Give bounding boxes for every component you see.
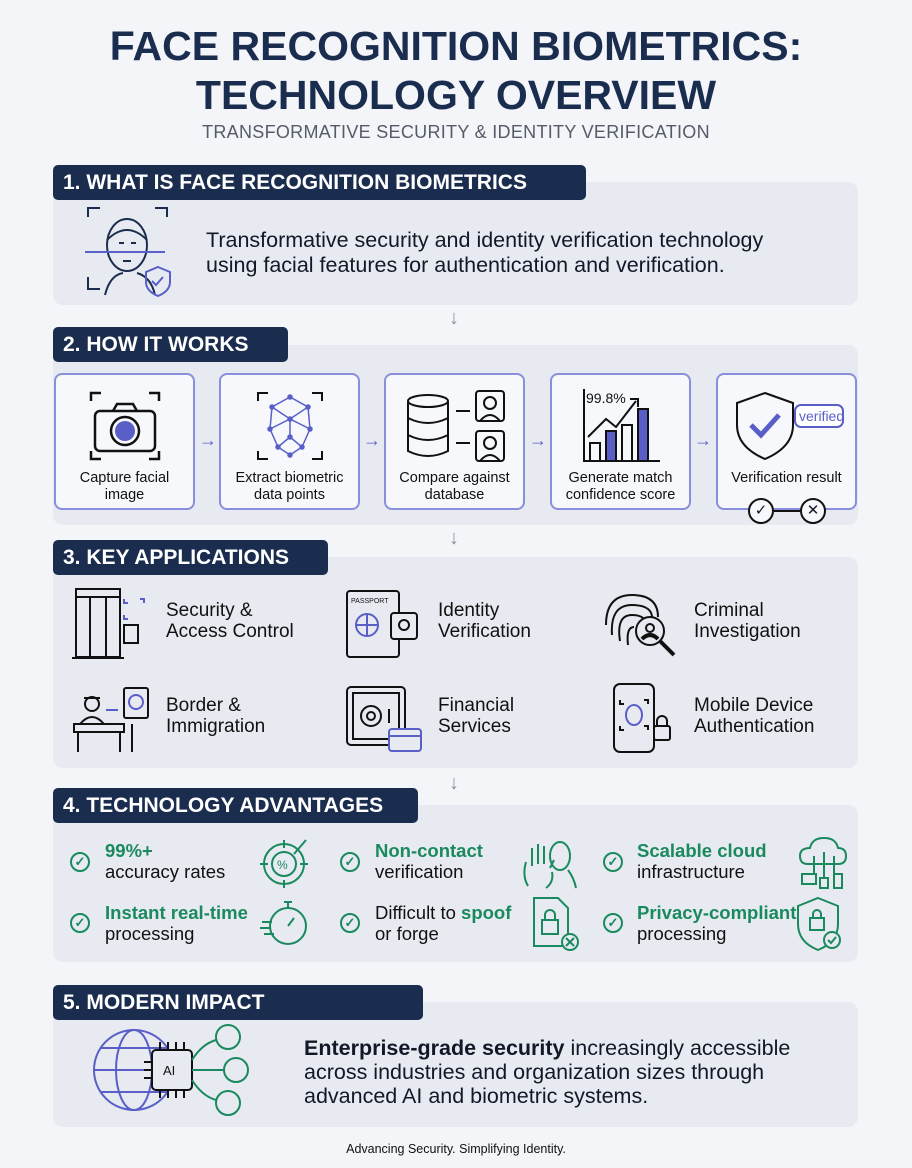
advantage: spoof: or forge [375,923,439,944]
card: extract: data points [254,487,325,503]
panel: advantages [53,805,858,962]
text: identity: Identity [438,600,499,621]
advantage: privacy: processing [637,923,726,944]
text: impact: across industries and organization sizes through [304,1060,764,1084]
advantage: spoof: ✓ [345,915,355,930]
heading 2 [53,327,288,362]
advantage: non-contact: Non-contact [375,840,483,861]
advantage: cloud: infrastructure [637,861,745,882]
card: score: confidence score [566,487,675,503]
text: mobile: Mobile Device [694,695,813,716]
text: border: Border & [166,695,241,716]
panel: applications [53,557,858,768]
advantage: accuracy: ✓ [75,854,85,869]
text: security: Access Control [166,621,294,642]
advantage: real-time: processing [105,923,194,944]
icon: check/cross: ✕ [807,502,819,519]
icon: safe [346,686,422,752]
text: security [166,600,294,642]
card: result: verified [798,408,844,424]
advantage: accuracy: 99%+ [105,840,153,861]
advantage: non-contact [340,840,577,889]
text: border: Immigration [166,716,265,737]
icon: AI globe [93,1024,249,1116]
card: capture [54,373,195,510]
heading 4: 4. TECHNOLOGY ADVANTAGES [63,794,383,817]
text: criminal [694,600,801,642]
advantage: spoof: Difficult to spoof [375,902,511,923]
advantage: privacy [603,896,841,952]
advantage: accuracy [70,839,308,888]
card: compare: database [425,487,484,503]
advantage: real-time: ✓ [75,915,85,930]
advantage: real-time: Instant real-time [105,902,248,923]
advantage: cloud [603,837,847,889]
panel: impact [53,1002,858,1127]
advantage: privacy: ✓ [608,915,618,930]
title [110,23,802,118]
panel: what is [53,182,858,305]
arrow: → [199,430,217,450]
text: mobile [694,695,814,737]
advantage: real-time [70,901,307,945]
text: identity: Verification [438,621,531,642]
card: score: 99.8% [586,390,625,406]
panel: how it works [53,345,858,525]
heading 3: 3. KEY APPLICATIONS [63,546,289,569]
text: security: Security & [166,600,253,621]
footer: Advancing Security. Simplifying Identity. [346,1142,566,1156]
advantage: non-contact: ✓ [345,854,355,869]
title: FACE RECOGNITION BIOMETRICS: [110,23,802,69]
icon: check/cross: ✓ [755,502,767,519]
text: financial: Financial [438,695,514,716]
icon: AI globe: AI [163,1063,175,1078]
heading 3 [53,540,328,575]
text: financial: Services [438,716,511,737]
card: capture: Capture facial [80,470,169,486]
text: impact [304,1036,790,1108]
icon: access [72,588,145,659]
card: result: Verification result [731,470,842,486]
icon: fingerprint [605,594,676,656]
heading 5 [53,985,423,1020]
icon: passport [346,590,418,658]
heading 4 [53,788,418,823]
card: compare [384,373,525,510]
card: score: Generate match [568,470,672,486]
arrow down 3: ↓ [449,772,459,794]
card: extract: Extract biometric [236,470,343,486]
subtitle: TRANSFORMATIVE SECURITY & IDENTITY VERIFICATION [202,122,710,142]
text: impact: advanced AI and biometric systems. [304,1084,648,1108]
text: definition: Transformative security and identity verification technology [206,228,763,252]
text: impact: Enterprise-grade security increasingly accessible [304,1036,790,1060]
advantage: accuracy: % [277,858,288,872]
icon: mobile [613,683,671,753]
text: criminal: Investigation [694,621,801,642]
text: criminal: Criminal [694,600,764,621]
advantage: accuracy: accuracy rates [105,861,225,882]
advantage: spoof [340,897,579,951]
advantage: cloud: ✓ [608,854,618,869]
text: definition: using facial features for authentication and verification. [206,253,725,277]
card: extract [219,373,360,510]
advantage: cloud: Scalable cloud [637,840,767,861]
arrow down 2: ↓ [449,527,459,549]
icon: passport: PASSPORT [351,598,389,605]
advantage: privacy: Privacy-compliant [637,902,796,923]
text: identity [438,600,531,642]
icon: face scan [85,207,171,297]
card: score [550,373,691,510]
arrow: → [363,430,381,450]
arrow down 1: ↓ [449,307,459,329]
text: mobile: Authentication [694,716,814,737]
heading 1 [53,165,586,200]
icon: border [73,687,149,752]
icon: check/cross [748,498,826,524]
heading 5: 5. MODERN IMPACT [63,991,264,1014]
arrow: → [694,430,712,450]
card: result [716,373,857,510]
text: definition [206,228,764,277]
card: capture: image [105,487,144,503]
heading 2: 2. HOW IT WORKS [63,333,248,356]
arrow: → [529,430,547,450]
text: border [166,695,265,737]
heading 1: 1. WHAT IS FACE RECOGNITION BIOMETRICS [63,171,527,194]
advantage: non-contact: verification [375,861,463,882]
text: financial [438,695,514,737]
card: compare: Compare against [399,470,510,486]
title: TECHNOLOGY OVERVIEW [196,72,716,118]
